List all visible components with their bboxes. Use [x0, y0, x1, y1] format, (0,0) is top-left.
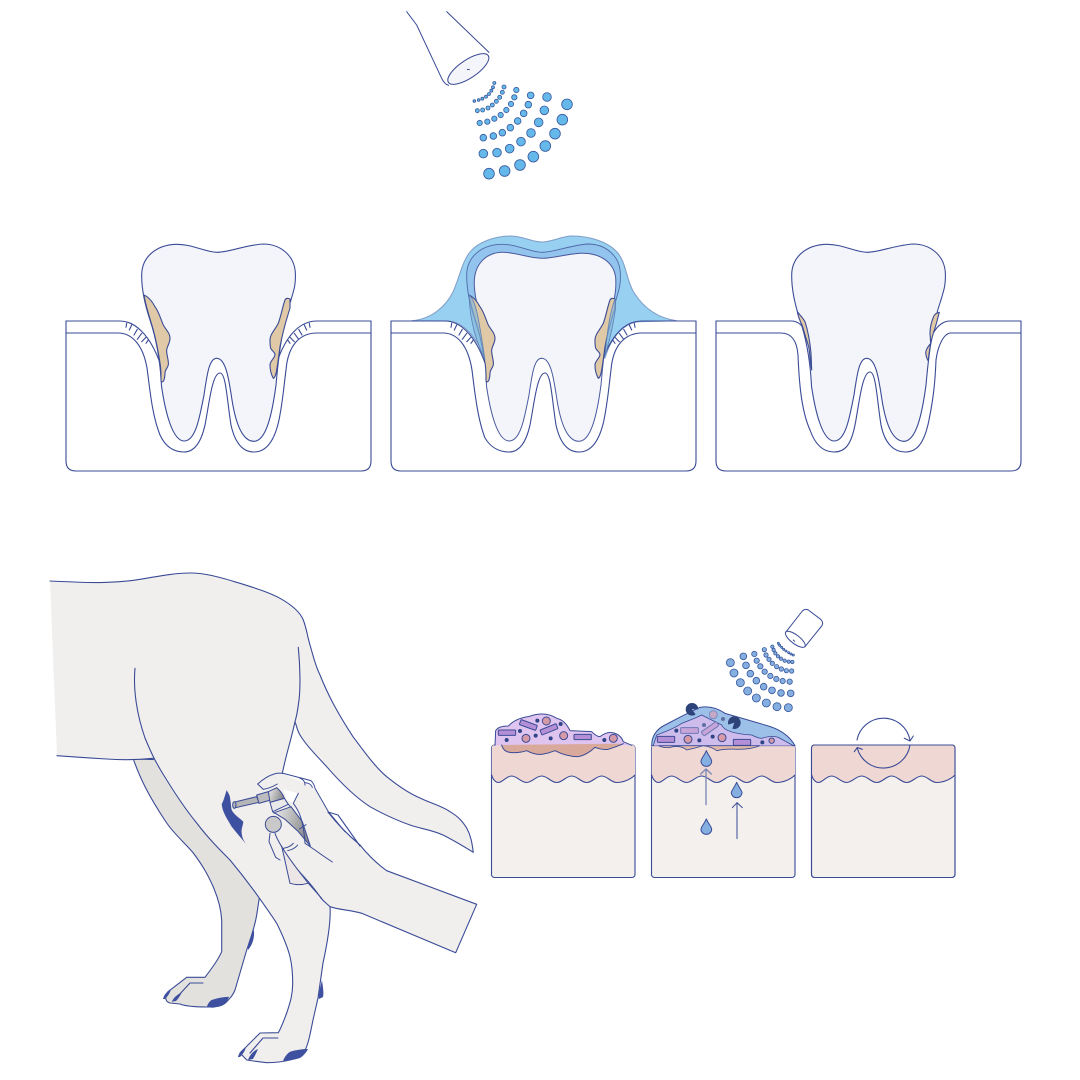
bacteria rods	[498, 720, 591, 740]
panel: tooth with blue gel coating	[391, 236, 696, 471]
tooth	[142, 244, 295, 441]
bacteria cocci	[522, 717, 617, 742]
panel: skin with biofilm	[492, 714, 635, 878]
panel: tooth after treatment	[716, 244, 1021, 471]
panel: skin with spray penetrating biofilm	[652, 703, 795, 878]
illustration: dog with owner's hand	[50, 573, 477, 1063]
icon: blue spray droplets	[473, 81, 572, 179]
far leg	[133, 759, 262, 1007]
applicator body	[268, 788, 284, 802]
icon: circular renewal arrows	[854, 718, 913, 768]
icon: droplets and arrows rising	[701, 751, 742, 839]
gel overlay on tartar	[469, 295, 616, 360]
dark patch on dog skin	[222, 790, 246, 844]
skin layers	[652, 745, 795, 878]
blue gel	[412, 236, 677, 359]
palm and finger pink	[281, 845, 308, 885]
gel band over tooth	[467, 244, 620, 350]
panel: tooth with tartar before treatment	[66, 244, 371, 471]
fingers	[258, 773, 345, 832]
thumb pad	[265, 816, 281, 832]
panel: healed skin with renewal cycle	[812, 718, 955, 878]
skin layers	[492, 745, 635, 878]
blue gel over biofilm	[652, 707, 795, 746]
bacteria rods	[657, 721, 751, 745]
tartar deposit	[469, 295, 495, 382]
skin layers	[812, 745, 955, 878]
icon: small spray droplets	[726, 642, 794, 712]
small particles	[505, 719, 606, 742]
hand holding applicator	[233, 773, 345, 898]
applicator tube	[233, 797, 259, 808]
body and tail fill	[50, 573, 473, 1063]
icon: pac-man enzymes	[686, 703, 741, 729]
biofilm layer	[653, 715, 793, 746]
tooth	[474, 252, 616, 441]
small particles	[674, 717, 764, 744]
tooth	[792, 244, 945, 441]
bacteria cocci	[684, 711, 774, 743]
far paw accents	[163, 930, 254, 1008]
icon: small spray nozzle	[783, 609, 823, 650]
biofilm penetration into skin	[658, 746, 760, 751]
icon: spray nozzle above teeth	[407, 12, 493, 90]
near paw accents	[238, 980, 323, 1061]
tartar residue	[797, 312, 812, 370]
biofilm layer	[495, 714, 632, 745]
sleeve	[280, 787, 477, 953]
biofilm penetration into skin	[502, 744, 623, 757]
dog outlines	[50, 573, 473, 852]
tartar deposit	[144, 295, 170, 382]
